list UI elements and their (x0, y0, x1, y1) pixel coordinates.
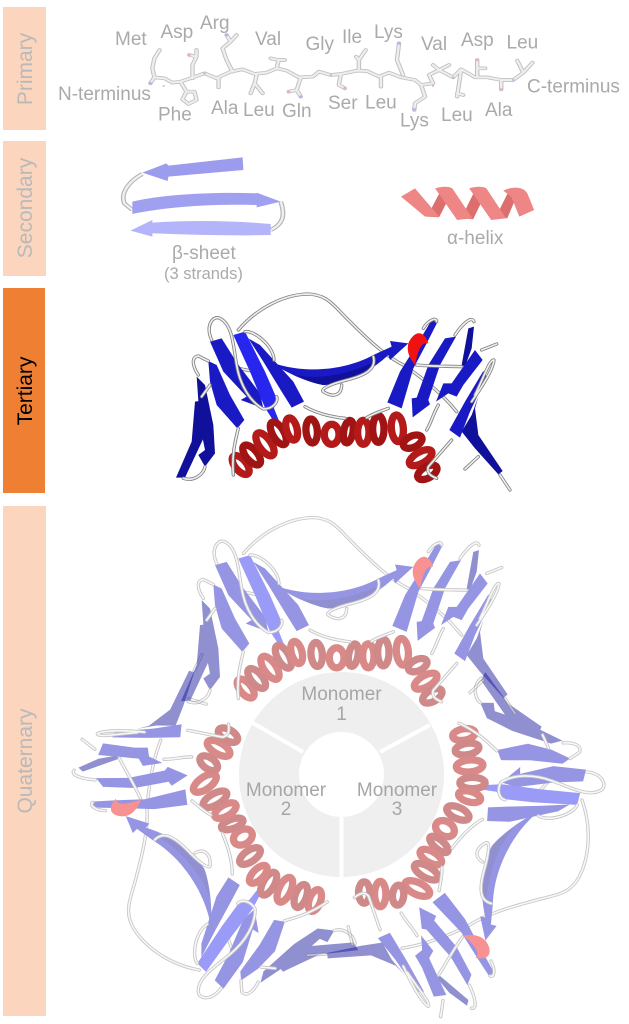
monomer 3 label: 3 (392, 799, 402, 820)
monomer 3 label: Monomer (357, 780, 437, 801)
primary structure: amino acid labels: Leu (243, 100, 275, 121)
beta sheet label: (3 strands) (164, 265, 243, 283)
monomer 2 label: 2 (281, 799, 291, 820)
primary structure: amino acid labels: Ala (211, 98, 239, 119)
panel label: Secondary (3, 141, 46, 276)
panel label: Quaternary: Quaternary (14, 708, 37, 814)
primary structure: amino acid labels: Ala (485, 100, 513, 121)
primary structure: amino acid labels: Lys (400, 111, 429, 132)
primary structure: amino acid labels: Gln (282, 101, 312, 122)
monomer 2 label: Monomer (246, 780, 326, 801)
quaternary structure: monomer ring diagram (253, 702, 430, 880)
panel label: Quaternary (3, 506, 46, 1016)
panel label: Primary (3, 7, 46, 130)
quaternary structure: monomer 3 ribbon (308, 666, 629, 1024)
alpha helix label: α-helix (447, 228, 504, 249)
quaternary structure: monomer 2 ribbon (32, 655, 369, 1024)
beta sheet label (164, 243, 243, 283)
primary structure: amino acid labels: Gly (306, 34, 334, 55)
primary structure: amino acid labels: Arg (200, 13, 230, 34)
secondary structure: alpha helix ribbon (401, 187, 534, 220)
primary structure: amino acid labels: Lys (374, 22, 403, 43)
primary structure: amino acid labels: Phe (158, 105, 192, 126)
panel label: Tertiary: Tertiary (14, 356, 37, 425)
primary structure: amino acid labels: Leu (506, 32, 538, 54)
panel label: Secondary: Secondary (14, 157, 37, 258)
monomer 1 label: 1 (336, 704, 347, 725)
primary structure: amino acid labels (58, 13, 620, 132)
primary structure: amino acid labels: C-terminus (527, 77, 620, 98)
secondary structure: beta sheet ribbon (123, 157, 283, 237)
primary structure: amino acid labels: N-terminus (58, 84, 151, 105)
primary structure: amino acid labels: Val (255, 29, 281, 50)
primary structure: amino acid labels: Ile (342, 27, 362, 48)
primary structure: amino acid labels: Ser (328, 93, 358, 114)
tertiary structure: protein monomer ribbon (176, 294, 510, 490)
primary structure: amino acid labels: Leu (441, 105, 473, 126)
monomer 1 label: Monomer (301, 684, 382, 705)
primary structure: stick model of peptide chain (149, 34, 533, 111)
quaternary structure: monomer 1 ribbon (181, 517, 515, 713)
panel label: Primary: Primary (14, 32, 37, 105)
primary structure: amino acid labels: Asp (461, 30, 494, 51)
primary structure: amino acid labels: Met (115, 29, 147, 50)
beta sheet label: β-sheet (172, 243, 236, 264)
primary structure: amino acid labels: Val (421, 34, 447, 55)
panel label: Tertiary (3, 288, 45, 493)
primary structure: amino acid labels: Leu (365, 93, 397, 114)
primary structure: amino acid labels: Asp (160, 22, 193, 43)
